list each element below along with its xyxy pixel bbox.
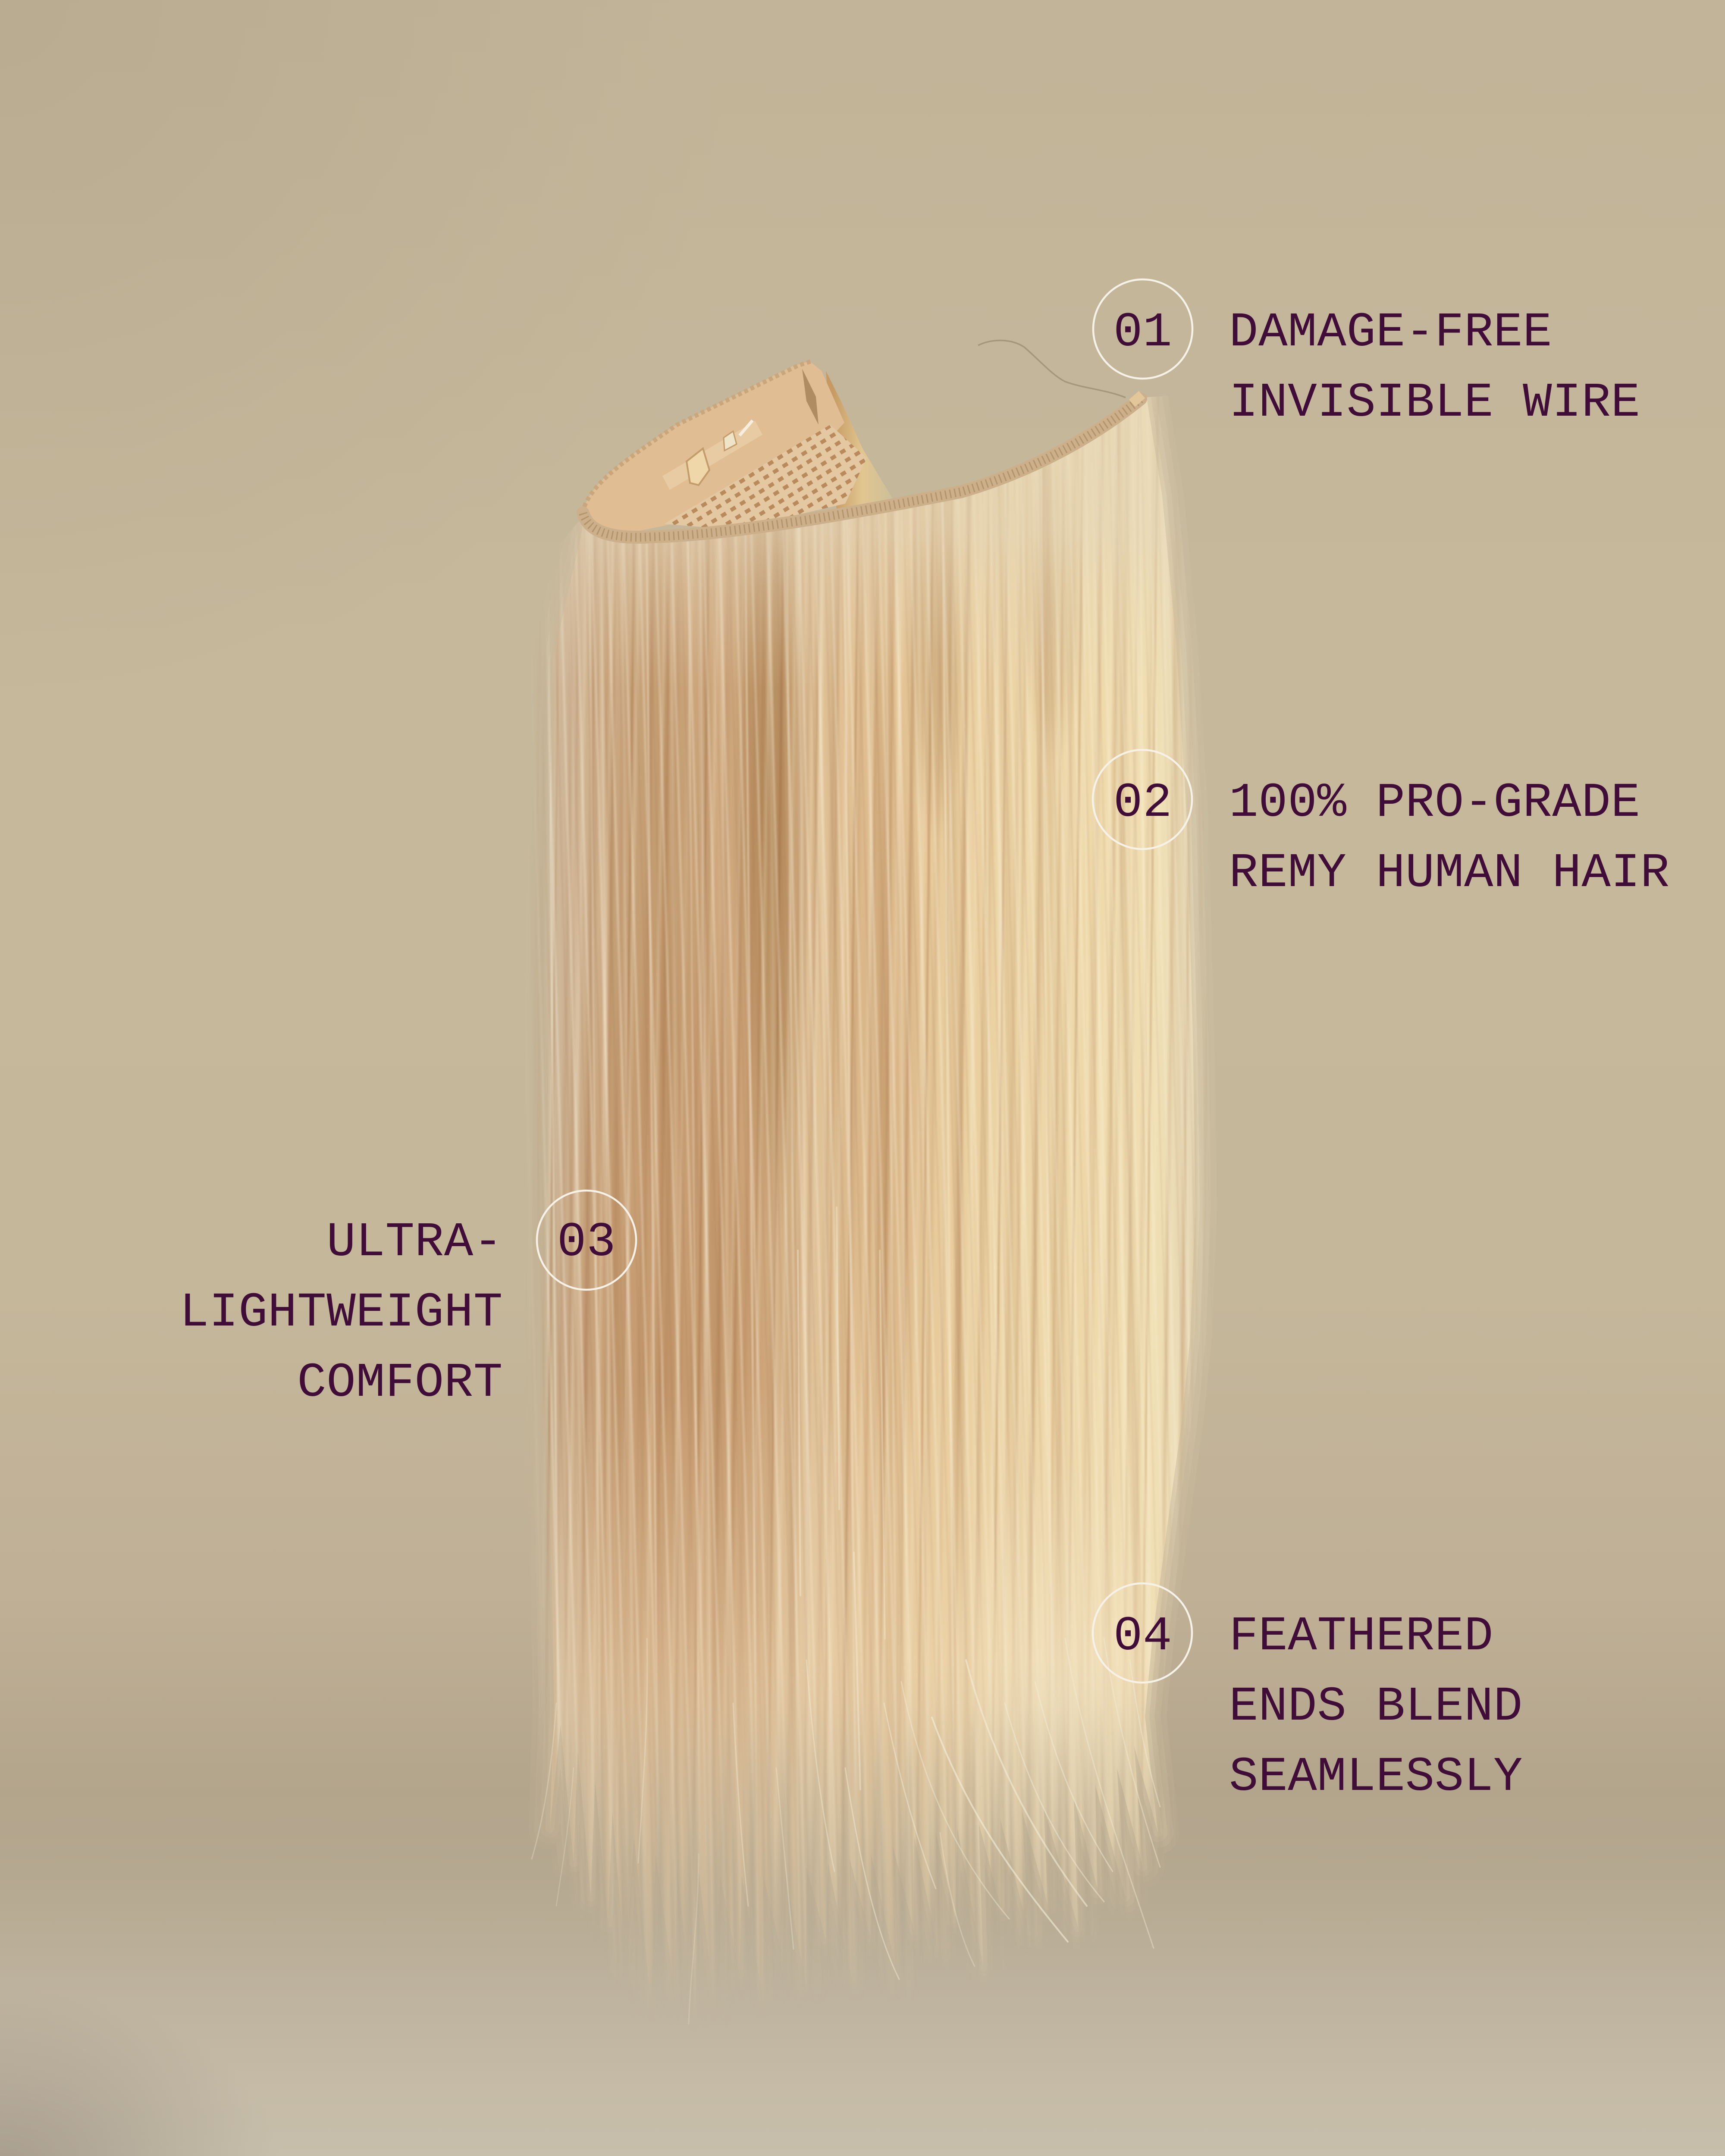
clip backing strip (662, 421, 762, 490)
label text 04: ENDS BLEND (1229, 1679, 1523, 1734)
label text 03: ULTRA- (326, 1215, 503, 1270)
number badge 04 (1093, 1583, 1192, 1683)
callout 02: 100% pro-grade remy human hair (1093, 750, 1670, 901)
right side highlight wash (862, 345, 1251, 2070)
callout 03: ultra-lightweight comfort (180, 1191, 636, 1410)
pale haze below the weft (474, 345, 1251, 690)
tonal bands in the hair (535, 388, 1085, 1897)
lower hair lightening (474, 1380, 1251, 2070)
number badge 02: 02 (1113, 775, 1172, 830)
label text 03: LIGHTWEIGHT (180, 1285, 503, 1340)
main hair curtain (531, 397, 1209, 2025)
woven front weft band (583, 395, 1142, 537)
number badge 01 (1093, 279, 1192, 379)
panel shadow fold (802, 369, 819, 425)
number badge 02 (1093, 750, 1192, 849)
callout 04: feathered ends blend seamlessly (1093, 1583, 1523, 1805)
mesh weft panel (664, 425, 867, 530)
label text 04: FEATHERED (1229, 1609, 1493, 1664)
inner tan wire panel (583, 361, 844, 535)
label text 02: REMY HUMAN HAIR (1229, 846, 1670, 901)
back hair behind the mesh (826, 371, 895, 511)
number badge 03: 03 (557, 1215, 616, 1270)
metal clip (687, 420, 753, 485)
loose light strands at the feathered ends (532, 1207, 1160, 2024)
number badge 04: 04 (1113, 1609, 1172, 1664)
panel top edge stitching (584, 361, 811, 507)
label text 03: COMFORT (297, 1355, 503, 1410)
number badge 01: 01 (1113, 305, 1172, 360)
callout 01: damage-free invisible wire (1093, 279, 1640, 430)
fine strand texture stripes (474, 345, 1251, 2070)
invisible wire strand (978, 340, 1126, 398)
number badge 03 (537, 1191, 636, 1290)
label text 02: 100% PRO-GRADE (1229, 775, 1640, 830)
label text 04: SEAMLESSLY (1229, 1749, 1523, 1805)
label text 01: INVISIBLE WIRE (1229, 375, 1640, 430)
hair extension photo illustration (531, 340, 1209, 2025)
label text 01: DAMAGE-FREE (1229, 305, 1552, 360)
